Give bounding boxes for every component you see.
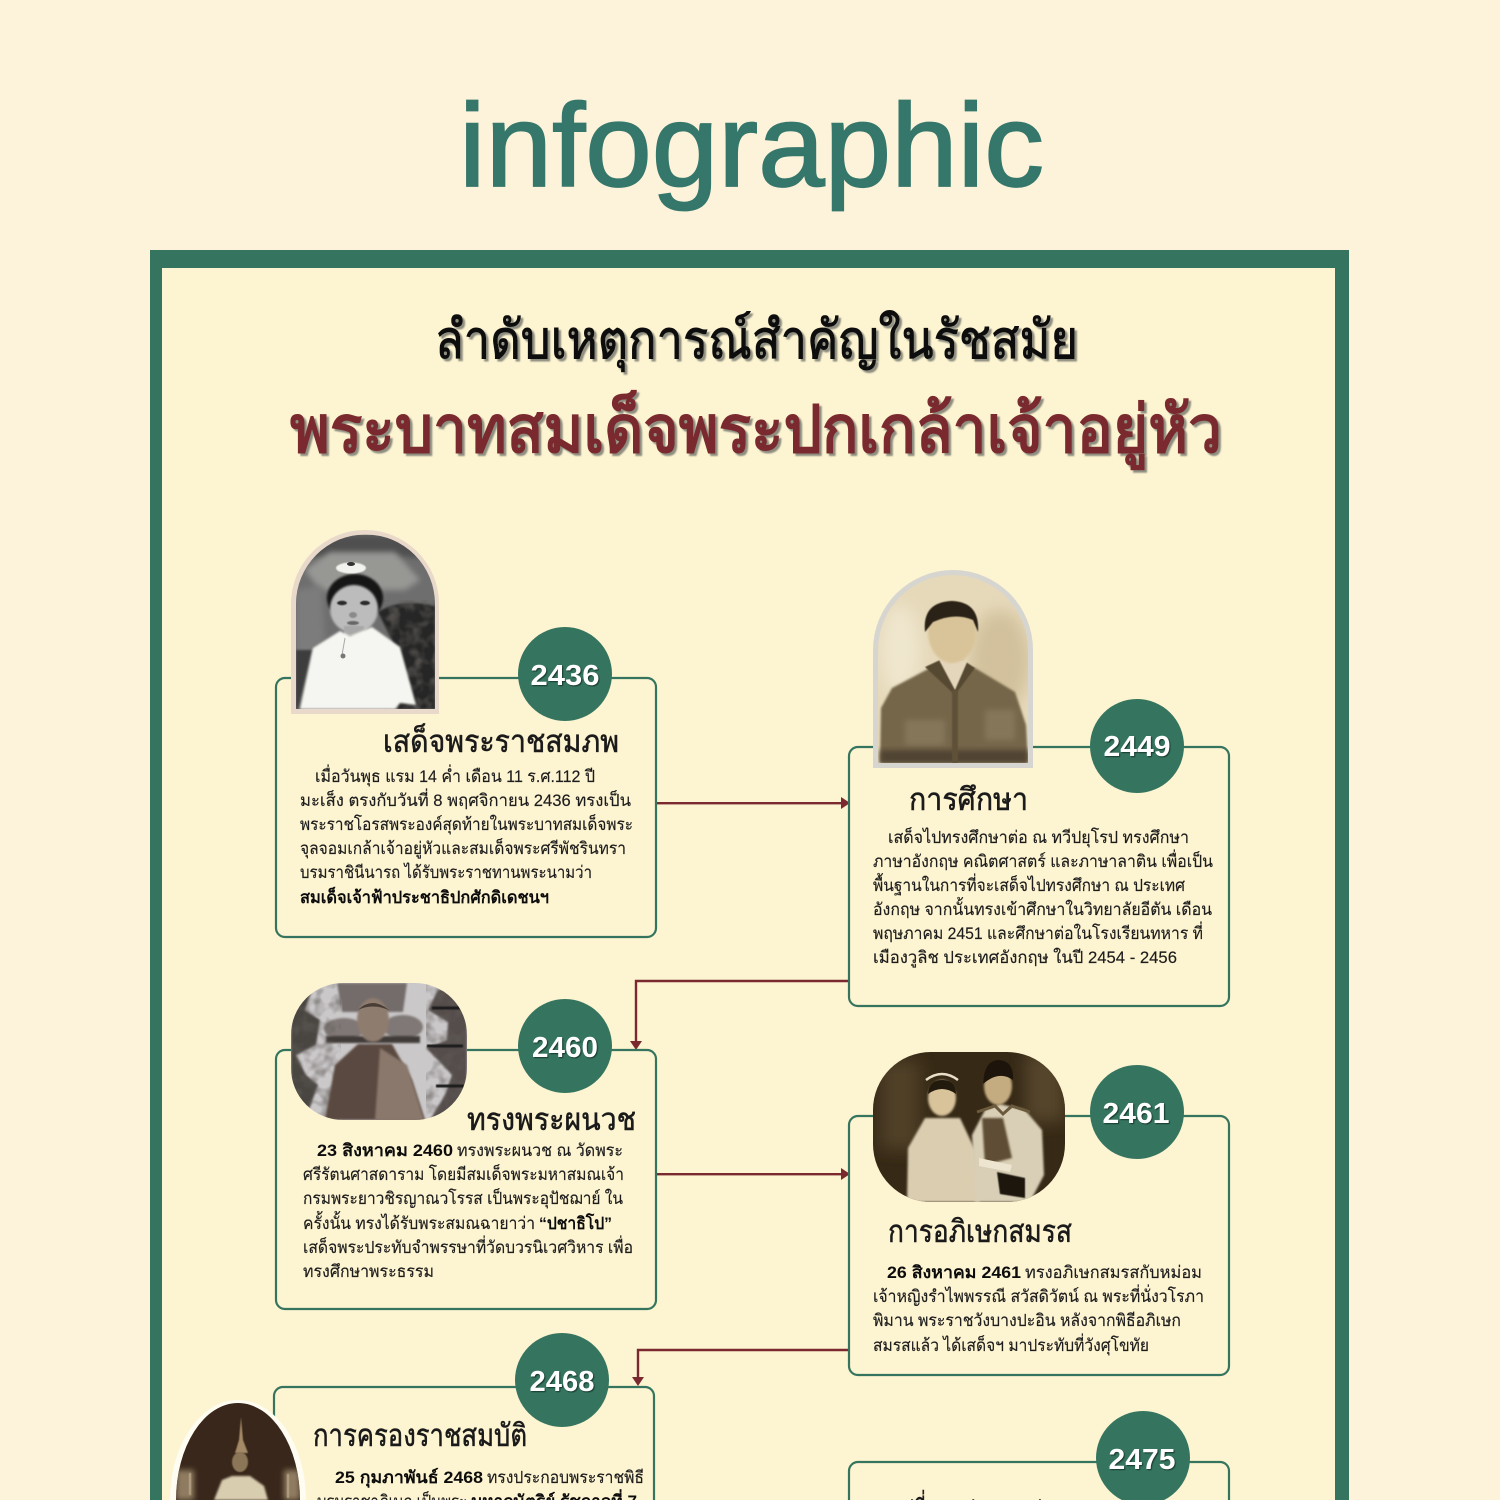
card outline — [274, 1387, 654, 1500]
body text: อังกฤษ จากนั้นทรงเข้าศึกษาในวิทยาลัยอีตัน เดือน — [873, 897, 1212, 919]
body text: เสด็จพระประทับจำพรรษาที่วัดบวรนิเวศวิหาร เพื่อ — [303, 1235, 633, 1257]
year badge 2436 — [518, 627, 612, 721]
year badge 2461: 2461 — [1102, 1098, 1170, 1130]
body text: เมื่อวันพุธ แรม 14 ค่ำ เดือน 11 ร.ศ.112 ปี — [315, 764, 595, 787]
panel interior — [162, 268, 1335, 1500]
arrow: 2461 to 2468 — [632, 1350, 849, 1386]
year badge 2468: 2468 — [530, 1366, 594, 1398]
body text: “ปชาธิโป” — [539, 1213, 612, 1233]
body text: เสด็จไปทรงศึกษาต่อ ณ ทวีปยุโรป ทรงศึกษา — [888, 826, 1189, 848]
card heading: การครองราชสมบัติ — [313, 1418, 527, 1453]
body text: เมืองวูลิช ประเทศอังกฤษ ในปี 2454 - 2456 — [873, 947, 1177, 968]
body text: 25 กุมภาพันธ์ 2468 — [335, 1467, 483, 1488]
year badge 2468 — [515, 1333, 609, 1427]
body text: ศรีรัตนศาสดาราม โดยมีสมเด็จพระมหาสมณเจ้า — [303, 1163, 624, 1184]
year badge 2436: 2436 — [530, 660, 600, 692]
card heading: การอภิเษกสมรส — [888, 1214, 1072, 1249]
body text — [317, 1467, 644, 1500]
heading: king name: พระบาทสมเด็จพระปกเกล้าเจ้าอยู่หัว — [290, 389, 1222, 471]
body text: พิมาน พระราชวังบางปะอิน หลังจากพิธีอภิเษก — [873, 1311, 1181, 1330]
body text: จุลจอมเกล้าเจ้าอยู่หัวและสมเด็จพระศรีพัชรินทรา — [300, 837, 626, 859]
framed panel — [150, 250, 1349, 1500]
body text: ทรงศึกษาพระธรรม — [303, 1262, 434, 1281]
panel: 2475 — [849, 1411, 1229, 1500]
panel: 2461 marriage — [849, 1052, 1229, 1375]
card outline — [276, 1050, 656, 1309]
year badge 2449 — [1090, 699, 1184, 793]
arrow: 2436 to 2449 — [657, 797, 850, 809]
card heading: เสด็จพระราชสมภพ — [383, 723, 619, 759]
photo: enthroned king — [170, 1400, 306, 1500]
arrow: 2449 to 2460 — [630, 981, 849, 1050]
body text: มะเส็ง ตรงกับวันที่ 8 พฤศจิกายน 2436 ทรงเป็น — [300, 788, 631, 810]
card outline — [849, 747, 1229, 1006]
panel: 2436 birth — [276, 530, 656, 937]
body text: พื้นฐานในการที่จะเสด็จไปทรงศึกษา ณ ประเทศ — [873, 873, 1185, 896]
card heading: การศึกษา — [909, 782, 1028, 817]
body text: ทรงพระผนวช ณ วัดพระ — [457, 1141, 623, 1160]
body text: พฤษภาคม 2451 และศึกษาต่อในโรงเรียนทหาร ที่ — [873, 921, 1203, 943]
panel: 2449 education — [849, 570, 1229, 1006]
body text: กรมพระยาวชิรญาณวโรรส เป็นพระอุปัชฌาย์ ใน — [303, 1187, 623, 1209]
card outline — [849, 1462, 1229, 1500]
body text: บรมราชินีนารถ ได้รับพระราชทานพระนามว่า — [300, 862, 592, 882]
year badge 2460: 2460 — [532, 1032, 598, 1064]
body text: พระราชโอรสพระองค์สุดท้ายในพระบาทสมเด็จพระ — [300, 813, 633, 835]
body text: ครั้งนั้น ทรงได้รับพระสมณฉายาว่า — [303, 1211, 535, 1233]
body text — [300, 764, 633, 907]
body text: ทรงประกอบพระราชพิธี — [487, 1468, 644, 1487]
body text: 23 สิงหาคม 2460 — [317, 1141, 453, 1160]
year badge 2461 — [1090, 1065, 1184, 1159]
card heading: ทรงพระผนวช — [467, 1102, 636, 1137]
body text — [873, 1263, 1204, 1356]
heading: timeline subtitle: ลำดับเหตุการณ์สำคัญในรัชสมัย — [435, 310, 1078, 372]
body text — [303, 1141, 633, 1281]
year badge 2475 — [1096, 1411, 1190, 1500]
body text: 26 สิงหาคม 2461 — [887, 1263, 1021, 1282]
card outline — [849, 1116, 1229, 1375]
year badge 2460 — [518, 999, 612, 1093]
panel: 2468 accession — [170, 1333, 654, 1500]
body text: สมรสแล้ว ได้เสด็จฯ มาประทับที่วังศุโขทัย — [873, 1333, 1149, 1356]
body text — [873, 826, 1213, 968]
arrow: 2460 to 2461 — [657, 1168, 850, 1180]
body text: สมเด็จเจ้าฟ้าประชาธิปกศักดิเดชนฯ — [300, 885, 549, 907]
year badge 2449: 2449 — [1104, 731, 1170, 763]
photo: infant prince — [291, 530, 439, 714]
body text: ทรงอภิเษกสมรสกับหม่อม — [1025, 1263, 1202, 1282]
photo: young prince in uniform — [873, 570, 1033, 768]
body text: ภาษาอังกฤษ คณิตศาสตร์ และภาษาลาติน เพื่อเป็น — [873, 849, 1213, 871]
year badge 2475: 2475 — [1108, 1444, 1176, 1476]
card outline — [276, 678, 656, 937]
body text: เจ้าหญิงรำไพพรรณี สวัสดิวัตน์ ณ พระที่นั่งวโรภา — [873, 1284, 1204, 1306]
main title: infographic: infographic — [459, 80, 1044, 212]
panel: 2460 monkhood — [276, 983, 656, 1309]
photo: royal couple — [873, 1052, 1065, 1202]
photo: prince as a monk — [291, 983, 467, 1120]
